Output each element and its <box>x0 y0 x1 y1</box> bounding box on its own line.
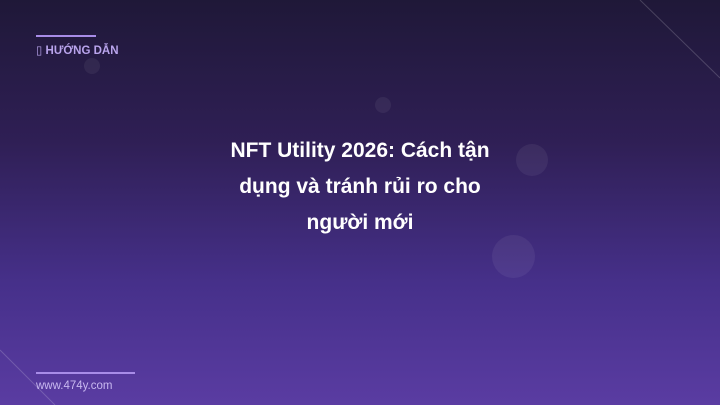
top accent bar <box>36 35 96 37</box>
category label: ▯ HƯỚNG DẪN <box>36 45 119 57</box>
title: dụng và tránh rủi ro cho <box>239 175 481 198</box>
footer accent bar <box>36 372 135 374</box>
title: NFT Utility 2026: Cách tận <box>230 139 490 162</box>
title: người mới <box>307 211 413 234</box>
title <box>230 139 490 234</box>
website: www.474y.com <box>36 380 112 392</box>
